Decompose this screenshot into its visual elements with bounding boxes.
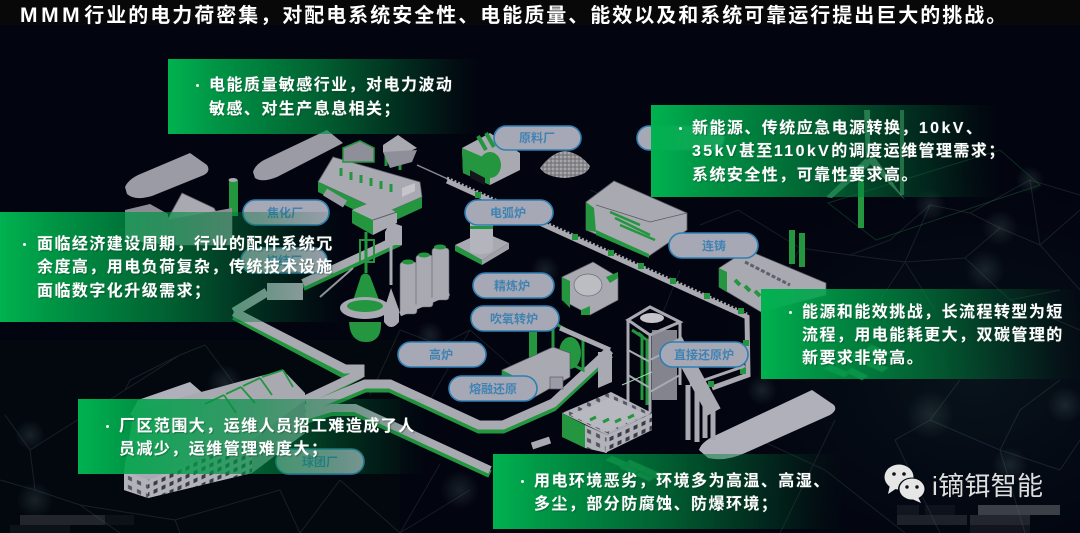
mosaic: left [10, 515, 134, 533]
casting plant [586, 181, 687, 258]
text line: 敏感、对生产息息相关； [209, 101, 401, 118]
bullet [789, 311, 792, 314]
panel: energy efficiency [761, 289, 1080, 379]
pill: 高炉 [398, 342, 486, 367]
panel: power quality [168, 59, 480, 134]
bullet [521, 480, 524, 483]
pill: 焦化厂 [243, 200, 329, 225]
text line: 能源和能效挑战，长流程转型为短 [802, 304, 1064, 321]
bullet [23, 243, 26, 246]
raw material plant [462, 133, 520, 185]
pill: 高炉: 高炉 [429, 347, 453, 362]
panel: construction cycle [0, 212, 345, 322]
rail [417, 165, 748, 388]
text line: 新能源、传统应急电源转换，10kV、 [692, 120, 983, 137]
text line: 面临经济建设周期，行业的配件系统冗 [37, 236, 334, 253]
blast furnace [340, 232, 390, 342]
mosaic: right [897, 505, 1060, 533]
pill: 精炼炉 [473, 273, 554, 298]
text line: 厂区范围大，运维人员招工难造成了人 [119, 418, 416, 435]
ship: upper left [125, 153, 208, 198]
pill: 直接还原炉: 直接还原炉 [674, 347, 734, 362]
pill: 电弧炉 [465, 200, 553, 225]
pill: hidden [637, 126, 724, 150]
bullet [679, 127, 682, 130]
upper plant [318, 135, 422, 245]
pill: 直接还原炉 [660, 342, 748, 367]
lattice block [562, 372, 652, 453]
bullet [196, 84, 199, 87]
conveyors [234, 238, 610, 474]
ore pile [540, 151, 590, 178]
panel: staffing [78, 399, 428, 474]
pill: 连铸 [669, 233, 758, 258]
pill: 球团厂: 球团厂 [302, 454, 338, 469]
watermark text: i镝铒智能 [932, 471, 1043, 501]
pill: 烧结厂: 烧结厂 [266, 253, 302, 268]
text line: 35kV甚至110kV的调度运维管理需求； [692, 143, 1006, 160]
panel: energy dispatch [651, 105, 1000, 197]
arc furnace [455, 222, 509, 265]
pill: 原料厂: 原料厂 [519, 130, 555, 145]
network pattern [0, 180, 1080, 533]
icon: wechat [884, 464, 926, 503]
coke plant [125, 178, 238, 245]
right rolling plant [719, 230, 826, 312]
wind turbines [826, 110, 1040, 240]
pill: 吹氧转炉: 吹氧转炉 [490, 311, 538, 326]
pill: 熔融还原: 熔融还原 [469, 381, 517, 396]
title: MMM行业的电力荷密集，对配电系统安全性、电能质量、能效以及和系统可靠运行提出巨大的挑战。 [20, 4, 1008, 27]
converter [562, 262, 618, 315]
bullet [106, 425, 109, 428]
pill: 电弧炉: 电弧炉 [490, 205, 526, 220]
pill: 焦化厂: 焦化厂 [267, 205, 303, 220]
text line: 员减少，运维管理难度大； [119, 441, 328, 458]
pill: 熔融还原 [449, 376, 537, 401]
ship: upper middle [253, 130, 343, 180]
network nodes [15, 166, 1080, 518]
stoves [384, 232, 449, 327]
text line: 系统安全性，可靠性要求高。 [692, 167, 919, 184]
text line: 新要求非常高。 [802, 350, 924, 367]
ship: lower right [699, 390, 835, 459]
text line: 余度高，用电负荷复杂，传统技术设施 [37, 259, 334, 276]
pill: 吹氧转炉 [471, 306, 559, 331]
sinter plant [124, 370, 305, 498]
pill: 烧结厂 [241, 248, 327, 273]
pill: 连铸: 连铸 [702, 238, 726, 253]
text line: 流程，用电能耗更大，双碳管理的 [802, 327, 1064, 344]
text line: 电能质量敏感行业，对电力波动 [209, 77, 453, 94]
text line: 用电环境恶劣，环境多为高温、高湿、 [534, 473, 831, 490]
text line: 多尘，部分防腐蚀、防爆环境； [534, 496, 778, 513]
pill: 球团厂 [276, 449, 364, 474]
smelting reduction plant [502, 322, 612, 398]
text line: 面临数字化升级需求； [37, 283, 212, 300]
pill: 精炼炉: 精炼炉 [494, 278, 530, 293]
vehicle group [606, 456, 666, 481]
vehicle group: right [824, 345, 890, 380]
pill: 原料厂 [494, 126, 581, 150]
ship: lower left [130, 382, 205, 420]
panel: harsh environment [493, 454, 842, 529]
direct reduction tower [628, 307, 745, 442]
